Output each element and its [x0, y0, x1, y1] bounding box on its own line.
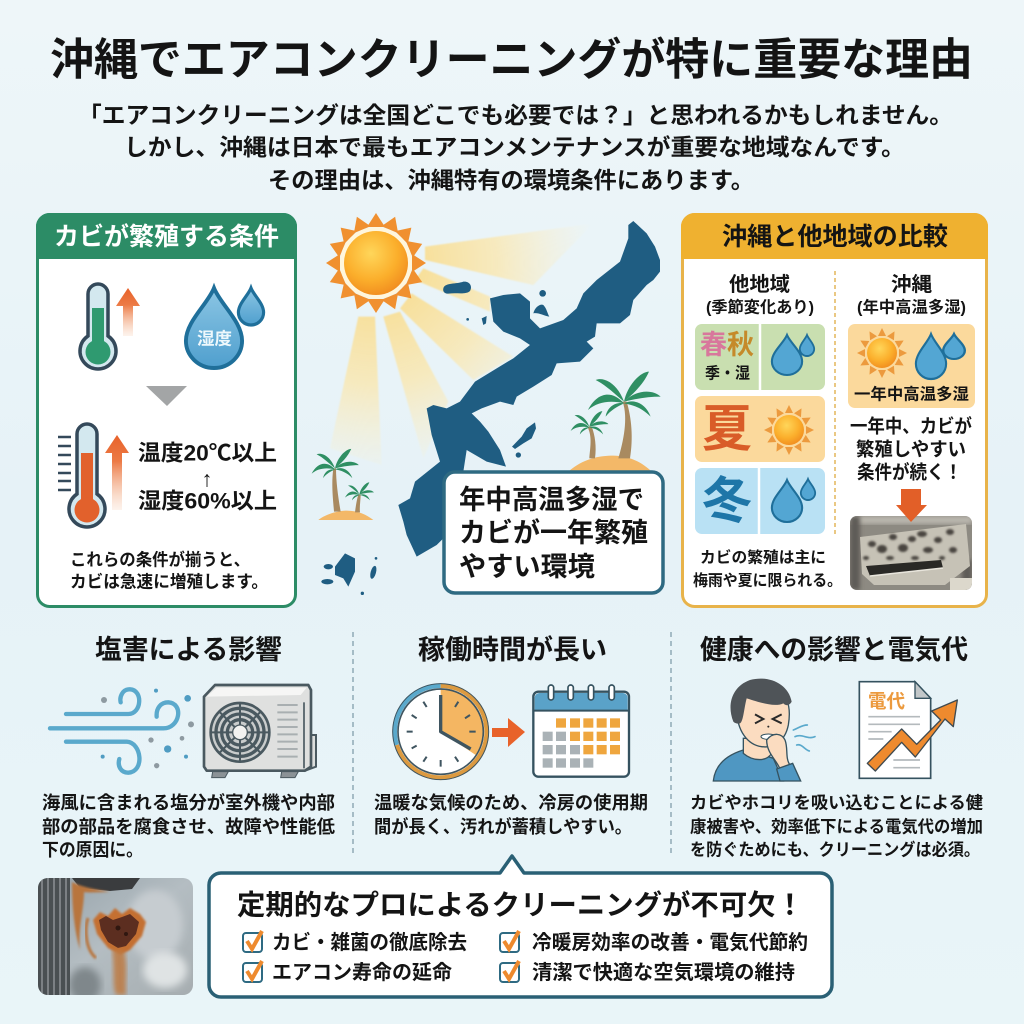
icon: humidity drop — [186, 288, 242, 368]
body text: 康被害や、効率低下による電気代の増加 — [690, 816, 983, 836]
icon: gray down triangle — [146, 386, 187, 406]
icon: clock — [393, 684, 489, 780]
season card: winter — [695, 468, 825, 534]
panel header: 沖縄と他地域の比較 — [722, 223, 948, 251]
temperature and humidity thresholds — [138, 440, 277, 514]
caption: other regions: カビの繁殖は主に — [700, 548, 826, 566]
panel: Okinawa map with sun — [312, 213, 663, 595]
body text: を防ぐためにも、クリーニングは必須。 — [690, 840, 980, 860]
panel header: カビが繁殖する条件 — [54, 222, 279, 251]
column heading: Okinawa: 沖縄 — [891, 273, 932, 296]
caption: これらの条件が揃うと、 — [70, 550, 250, 570]
temperature and humidity thresholds: 湿度60%以上 — [138, 488, 277, 514]
checklist item: efficiency and savings: 冷暖房効率の改善・電気代節約 — [532, 931, 808, 954]
caption: other regions — [693, 548, 842, 590]
Okinawa message — [850, 414, 972, 484]
intro text: しかし、沖縄は日本で最もエアコンメンテナンスが重要な地域なんです。 — [124, 134, 905, 160]
icon: humidity drop: 湿度 — [197, 330, 232, 348]
arrow: clock to calendar — [492, 718, 525, 747]
callout: year-round heat and humidity: カビが一年繁殖 — [459, 517, 648, 548]
season card: spring and autumn: 秋 — [727, 330, 754, 360]
section: health and electricity cost — [690, 635, 983, 860]
panel: comparison of Okinawa and other regions — [681, 213, 988, 606]
checklist item: clean air: 清潔で快適な空気環境の維持 — [532, 961, 795, 984]
icon: green thermometer — [80, 284, 116, 369]
icon: electricity bill rising: 電代 — [868, 692, 905, 712]
temperature and humidity thresholds: 温度20℃以上 — [138, 440, 277, 466]
photo: moldy air conditioner — [850, 516, 972, 590]
icon: palm trees on left island — [312, 449, 374, 520]
arrow: down to mold photo — [896, 489, 927, 522]
icon: red up arrow — [105, 435, 129, 510]
panel header — [681, 213, 988, 259]
column heading: other regions: (季節変化あり) — [706, 298, 814, 316]
callout: year-round heat and humidity: やすい環境 — [459, 552, 595, 582]
body text — [42, 792, 335, 860]
heading: 稼働時間が長い — [418, 634, 607, 665]
icon: coughing person — [713, 679, 815, 781]
body text: 下の原因に。 — [42, 840, 143, 860]
caption: other regions: 梅雨や夏に限られる。 — [693, 570, 842, 590]
section: salt damage — [42, 635, 335, 860]
panel: mold conditions — [36, 213, 297, 606]
season card: spring and autumn: 春 — [700, 330, 727, 360]
body text: 部の部品を腐食させ、故障や性能低 — [42, 817, 335, 837]
icon: outdoor AC unit — [204, 685, 316, 778]
season card: winter: 冬 — [702, 473, 752, 529]
intro text: 「エアコンクリーニングは全国どこでも必要では？」と思われるかもしれません。 — [78, 102, 953, 128]
icon: temperature up arrow — [116, 288, 140, 336]
callout: year-round heat and humidity — [444, 472, 663, 593]
Okinawa message: 条件が続く！ — [857, 460, 962, 484]
Okinawa climate card — [848, 324, 975, 408]
photo: corroded metal — [38, 878, 193, 1003]
heading: 健康への影響と電気代 — [700, 635, 968, 665]
column heading: other regions: 他地域 — [729, 273, 790, 296]
intro text: その理由は、沖縄特有の環境条件にあります。 — [268, 167, 754, 193]
checklist item: longer lifespan: エアコン寿命の延命 — [272, 961, 452, 984]
body text: 温暖な気候のため、冷房の使用期 — [374, 792, 648, 813]
Okinawa message: 一年中、カビが — [850, 414, 972, 438]
season card: summer: 夏 — [702, 401, 752, 457]
icon: electricity bill rising — [859, 682, 957, 778]
body text — [374, 792, 648, 837]
icon: small drop — [238, 288, 264, 325]
title: 沖縄でエアコンクリーニングが特に重要な理由 — [50, 36, 973, 84]
season card: spring and autumn: 季・湿 — [705, 364, 750, 382]
icon: red thermometer — [58, 424, 105, 527]
body text — [690, 792, 983, 860]
intro text — [78, 102, 953, 193]
column heading: Okinawa — [857, 273, 966, 316]
Okinawa climate card: 一年中高温多湿 — [854, 384, 969, 404]
body text: カビやホコリを吸い込むことによる健 — [690, 792, 983, 812]
callout: professional cleaning — [209, 856, 832, 997]
icon: sea wind with salt particles — [50, 689, 194, 773]
caption — [70, 550, 268, 592]
body text: 海風に含まれる塩分が室外機や内部 — [42, 792, 335, 813]
divider — [353, 632, 671, 855]
column heading: Okinawa: (年中高温多湿) — [857, 298, 966, 316]
panel header — [36, 213, 297, 259]
icon: sun — [326, 213, 426, 313]
map: Okinawa main island and outlying islands — [321, 221, 660, 595]
caption: カビは急速に増殖します。 — [70, 572, 268, 592]
icon: calendar — [533, 685, 629, 777]
body text: 間が長く、汚れが蓄積しやすい。 — [374, 816, 632, 837]
section: long operating hours — [374, 634, 648, 837]
temperature and humidity thresholds: ↑ — [202, 466, 212, 492]
column heading: other regions — [706, 273, 814, 316]
season card: summer — [695, 396, 825, 462]
heading: 塩害による影響 — [95, 635, 282, 665]
checklist item: mold removal: カビ・雑菌の徹底除去 — [272, 931, 467, 954]
callout: year-round heat and humidity: 年中高温多湿で — [459, 485, 644, 515]
icon: palm trees on right island — [568, 372, 661, 472]
callout heading: 定期的なプロによるクリーニングが不可欠！ — [237, 888, 804, 920]
season card: spring and autumn — [695, 324, 825, 390]
sunlight beams — [330, 223, 593, 465]
Okinawa message: 繁殖しやすい — [856, 438, 966, 460]
